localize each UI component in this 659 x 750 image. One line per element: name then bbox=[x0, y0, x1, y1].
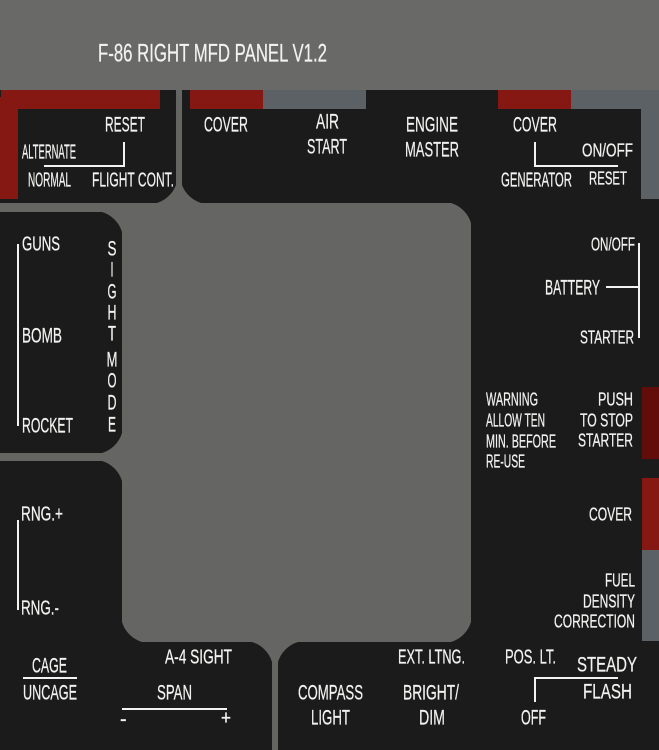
label: reset: RESET bbox=[105, 112, 145, 136]
label: off: OFF bbox=[521, 705, 546, 729]
label: sight mode vertical: I bbox=[110, 257, 114, 281]
label: guns: GUNS bbox=[22, 233, 60, 255]
panel: flight controls: ALTERNATE bbox=[22, 141, 76, 163]
red cover strip: air start bbox=[190, 90, 263, 109]
switch line: range bbox=[17, 520, 19, 610]
label: engine master: ENGINE bbox=[406, 112, 458, 136]
title: F-86 RIGHT MFD PANEL V1.2 bbox=[98, 39, 327, 67]
grey strip: generator bbox=[571, 90, 659, 109]
label: bomb: BOMB bbox=[22, 323, 62, 347]
label: generator on/off: ON/OFF bbox=[582, 140, 633, 160]
label: sight mode vertical: M bbox=[106, 347, 118, 371]
label: ext ltng: EXT. LTNG. bbox=[398, 646, 465, 668]
label: push to stop starter bbox=[578, 389, 633, 450]
divider line: cage bbox=[23, 677, 77, 679]
panel: sight mode bbox=[0, 212, 122, 453]
switch line: battery bbox=[606, 243, 639, 338]
dark red button strip bbox=[642, 387, 659, 459]
text block: warning: WARNING bbox=[486, 389, 538, 409]
label: sight mode vertical: S bbox=[108, 236, 116, 260]
top band bbox=[0, 0, 659, 90]
label: sight mode vertical: D bbox=[108, 390, 116, 414]
label: engine master bbox=[405, 112, 459, 161]
label: air start: AIR bbox=[316, 109, 339, 133]
panel: main right body bbox=[182, 90, 659, 750]
grey strip: generator side bbox=[641, 90, 659, 199]
label: engine master: MASTER bbox=[405, 137, 459, 161]
label: range minus: RNG.- bbox=[21, 597, 59, 619]
panel: range, cage and span bbox=[0, 461, 272, 750]
label: span: SPAN bbox=[157, 680, 192, 704]
label: air start: START bbox=[307, 134, 347, 158]
label: generator: GENERATOR bbox=[501, 169, 572, 191]
label: battery on/off: ON/OFF bbox=[591, 234, 635, 254]
text block: warning: MIN. BEFORE bbox=[486, 431, 556, 451]
switch line: flight controls bbox=[44, 142, 124, 166]
text block: warning: ALLOW TEN bbox=[486, 410, 545, 430]
label: cover, generator: COVER bbox=[513, 112, 557, 136]
label: bright/dim: DIM bbox=[419, 705, 445, 729]
label: compass light bbox=[298, 680, 363, 729]
label: a-4 sight: A-4 SIGHT bbox=[165, 646, 232, 668]
label: fuel density correction: FUEL bbox=[605, 570, 635, 590]
label: cover, air start: COVER bbox=[204, 112, 248, 136]
red cover strip: left bbox=[0, 97, 18, 199]
label: fuel density correction bbox=[554, 570, 635, 631]
label: push to stop starter: PUSH bbox=[598, 389, 633, 409]
switch line: position light bbox=[535, 678, 618, 702]
grey strip: air start bbox=[263, 90, 366, 109]
top cover strips bbox=[190, 90, 659, 199]
label: rocket: ROCKET bbox=[22, 413, 73, 437]
label: range plus: RNG.+ bbox=[21, 503, 63, 525]
label: push to stop starter: STARTER bbox=[578, 430, 633, 450]
label: compass light: LIGHT bbox=[311, 705, 350, 729]
label: air start bbox=[307, 109, 347, 158]
label: battery: BATTERY bbox=[545, 275, 600, 299]
panel: flight controls bbox=[0, 90, 176, 203]
label: sight mode vertical: H bbox=[108, 300, 116, 324]
red cover strip: fuel density bbox=[642, 478, 659, 550]
label: push to stop starter: TO STOP bbox=[580, 410, 633, 430]
scale line: span bbox=[122, 708, 227, 710]
label: flash: FLASH bbox=[583, 679, 632, 703]
label: sight mode vertical: O bbox=[108, 368, 116, 392]
label: plus: + bbox=[221, 707, 231, 729]
label: sight mode vertical: T bbox=[108, 321, 116, 345]
red cover strip: generator bbox=[498, 90, 571, 109]
red cover strip: top bbox=[1, 90, 160, 109]
label: sight mode vertical: G bbox=[108, 279, 116, 303]
label: uncage: UNCAGE bbox=[23, 680, 77, 704]
label: cage: CAGE bbox=[32, 653, 67, 677]
label: sight mode vertical bbox=[106, 236, 118, 436]
switch line: sight mode bbox=[17, 244, 19, 426]
label: fuel density correction: DENSITY bbox=[583, 591, 635, 611]
text block: warning bbox=[486, 389, 556, 471]
label: compass light: COMPASS bbox=[298, 680, 363, 704]
label: cover, fuel density: COVER bbox=[589, 504, 632, 524]
label: flight cont: FLIGHT CONT. bbox=[92, 169, 174, 191]
text block: warning: RE-USE bbox=[486, 451, 525, 471]
label: pos lt: POS. LT. bbox=[505, 646, 556, 668]
grey strip: fuel density bbox=[642, 550, 659, 641]
label: normal: NORMAL bbox=[28, 169, 71, 191]
label: bright/dim bbox=[403, 680, 459, 729]
switch line: generator bbox=[535, 142, 618, 166]
label: sight mode vertical: E bbox=[108, 412, 116, 436]
label: minus: - bbox=[120, 708, 127, 730]
label: bright/dim: BRIGHT/ bbox=[403, 680, 459, 704]
label: generator reset: RESET bbox=[589, 168, 627, 188]
